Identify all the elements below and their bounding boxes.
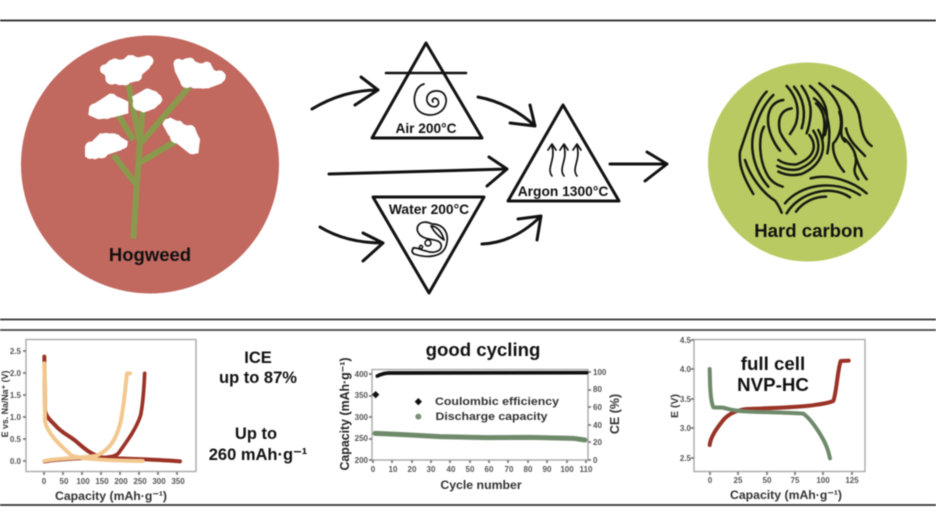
chart: cycling performance: 400 [355,370,369,379]
chart: half-cell voltage profile: E vs. Na/Na⁺ (V) [0,371,10,437]
text: ICE and capacity callouts: ICE [244,349,272,367]
triangle: air 200°C [372,43,482,138]
chart: half-cell voltage profile: 300 [152,477,166,486]
chart: cycling performance: 100 [593,368,607,377]
chart: cycling performance: 20 [593,438,602,447]
arrow: air to argon [478,97,535,126]
chart: half-cell voltage profile: 0.5 [10,435,22,444]
arrow: direct to argon [329,157,507,186]
triangle: argon 1300°C [508,105,619,201]
label: full cell NVP-HC: full cell [741,353,805,374]
chart: cycling performance: Coulombic efficiency [435,396,560,408]
text: ICE and capacity callouts: up to 87% [219,369,297,387]
chart: full cell voltage profile: 4.0 [680,365,692,374]
chart: cycling performance: 20 [408,465,417,474]
text: ICE and capacity callouts: Up to [235,425,277,443]
text: ICE and capacity callouts: 260 mAh·g⁻¹ [209,446,307,464]
chart: cycling performance: 30 [427,465,436,474]
chart: cycling performance: 40 [593,421,602,430]
chart: cycling performance: 60 [485,465,494,474]
chart: half-cell voltage profile: 250 [133,477,147,486]
panel: process flow [312,43,667,293]
chart: cycling performance: 10 [389,465,398,474]
label: full cell NVP-HC: NVP-HC [737,374,809,395]
chart: half-cell voltage profile: 100 [76,477,90,486]
chart: full cell voltage profile: Capacity (mAh·g⁻¹) [730,488,842,502]
chart: cycling performance: Cycle number [440,478,522,492]
chart: cycling performance: 40 [447,465,456,474]
chart: cycling performance: 60 [593,403,602,412]
chart: full cell voltage profile: 3.5 [680,395,692,404]
chart: half-cell voltage profile: 150 [95,477,109,486]
chart: full cell voltage profile: 75 [791,476,800,485]
text: ICE and capacity callouts [209,349,307,464]
chart: half-cell voltage profile: 1.5 [10,391,22,400]
triangle: water 200°C: Water 200°C [389,202,469,217]
chart: half-cell voltage profile: 1.0 [10,413,22,422]
triangle: water 200°C [373,197,484,293]
chart: full cell voltage profile: 3.0 [680,424,692,433]
chart: cycling performance: Capacity (mAh·g⁻¹) [338,358,352,470]
chart: cycling performance: Discharge capacity [436,411,548,423]
chart: cycling performance: 0 [371,465,376,474]
chart: cycling performance: 80 [593,385,602,394]
chart: cycling performance [338,339,622,492]
chart: cycling performance: 300 [355,413,369,422]
chart: full cell voltage profile: 125 [845,476,859,485]
panel: hard carbon circle [708,62,907,262]
arrow: to air [312,77,378,109]
panel: hogweed circle [21,36,279,294]
chart: full cell voltage profile: 2.5 [680,454,692,463]
chart: cycling performance: 70 [505,465,514,474]
chart: half-cell voltage profile: 2.0 [10,369,22,378]
chart: full cell voltage profile: 50 [763,476,772,485]
chart: cycling performance: 80 [524,465,533,474]
chart: cycling performance: 200 [355,456,369,465]
chart: half-cell voltage profile [0,340,196,503]
chart: full cell voltage profile: E (V) [669,394,681,418]
icon: hogweed plant [85,55,226,239]
chart: full cell voltage profile: 0 [708,476,713,485]
chart: half-cell voltage profile: 0 [42,477,47,486]
chart: cycling performance: 0 [593,456,598,465]
chart: full cell voltage profile: 4.5 [680,336,692,345]
label: hogweed: Hogweed [109,244,191,265]
chart: cycling performance: 100 [560,465,574,474]
chart: cycling performance: 350 [355,391,369,400]
chart: half-cell voltage profile: 200 [114,477,128,486]
chart: full cell voltage profile: 25 [734,476,743,485]
arrow: argon to hard carbon [610,152,667,181]
chart: half-cell voltage profile: 50 [60,477,69,486]
icon: hard carbon layers [740,83,872,213]
chart: half-cell voltage profile: 350 [171,477,185,486]
chart: cycling performance: 50 [466,465,475,474]
chart: half-cell voltage profile: Capacity (mAh·g⁻¹) [55,489,167,503]
chart: cycling performance: 250 [355,434,369,443]
chart: full cell voltage profile: 100 [816,476,830,485]
chart: half-cell voltage profile: 2.5 [10,347,22,356]
chart: full cell voltage profile [669,336,865,502]
chart: cycling performance: 110 [580,465,593,474]
chart: half-cell voltage profile: 0.0 [10,457,22,466]
arrow: to water [320,227,383,261]
triangle: air 200°C: Air 200°C [395,121,457,136]
label: hard carbon: Hard carbon [754,220,864,241]
heading: good cycling: good cycling [426,339,540,360]
chart: cycling performance: CE (%) [608,394,622,434]
chart: cycling performance: 90 [543,465,552,474]
triangle: argon 1300°C: Argon 1300°C [518,184,608,199]
arrow: water to argon [482,216,541,244]
